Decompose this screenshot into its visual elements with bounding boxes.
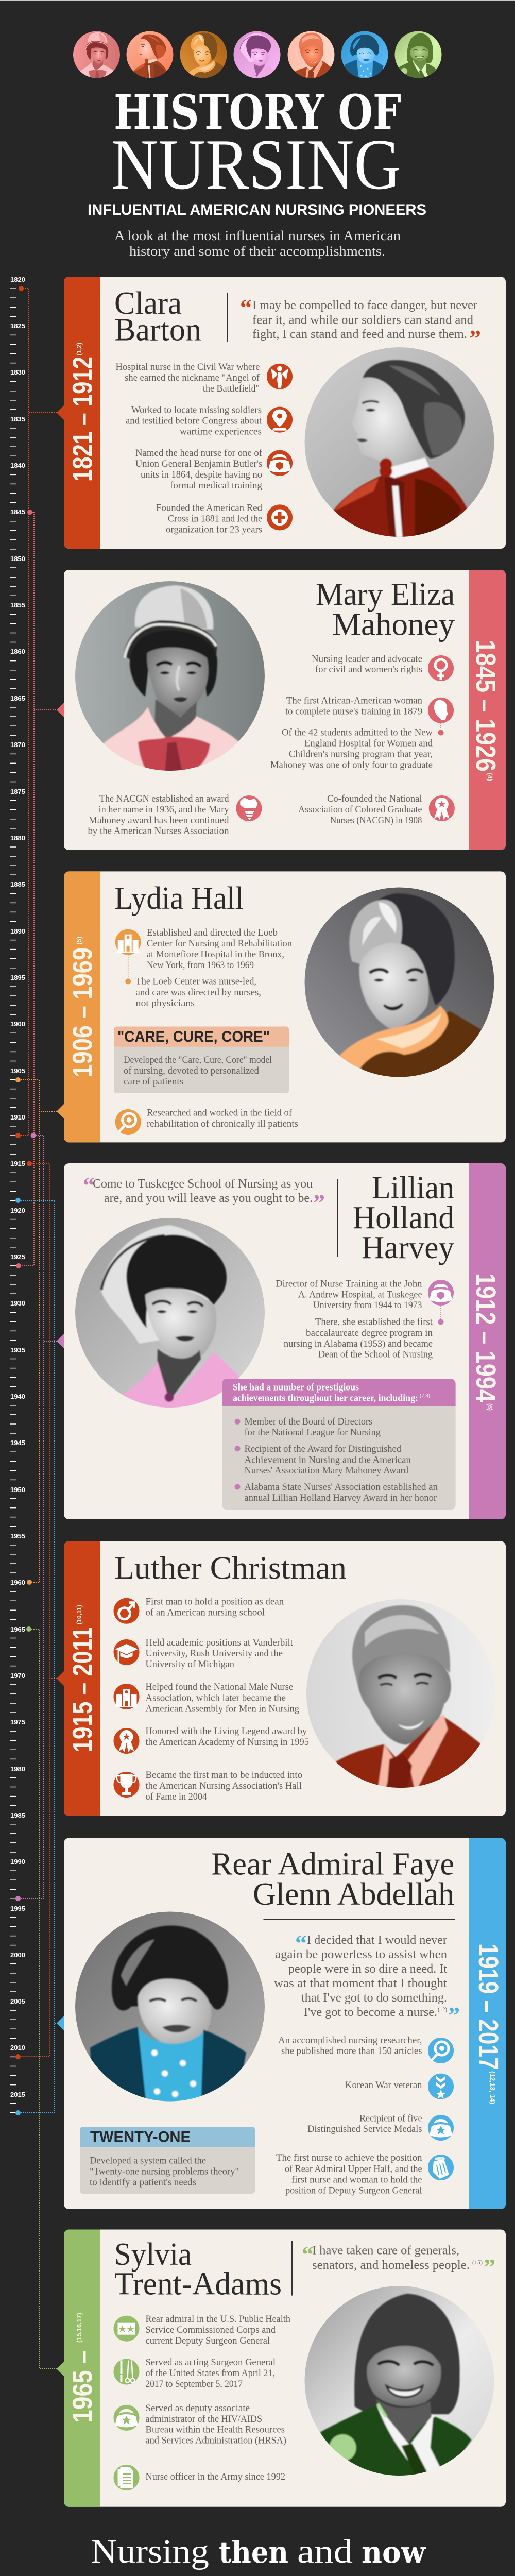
callout: Twenty-one: Developed a system called the	[90, 2155, 206, 2166]
quote: “	[240, 294, 252, 320]
callout: Twenty-one: to identify a patient's needs	[90, 2177, 196, 2188]
quote	[274, 1930, 460, 2028]
name: Rear Admiral Faye	[211, 1847, 454, 1882]
fact: rear admiral	[113, 2314, 290, 2346]
fact: Korean War veteran	[345, 2074, 454, 2099]
fact: acting Surgeon General	[113, 2357, 276, 2389]
fact: first male dean	[113, 1597, 284, 1624]
panel: Luther Christman	[57, 1541, 506, 1816]
portrait: Luther Christman	[306, 1599, 495, 1796]
quote: “	[302, 2241, 314, 2267]
fact: academic positions: University of Michigan	[145, 1659, 234, 1670]
portrait: Lydia Hall	[305, 887, 494, 1085]
fact: nurse-led: not physicians	[136, 998, 195, 1009]
card background	[64, 871, 506, 1142]
heading: Nursing then and now	[91, 2533, 426, 2570]
fact: NACGN award: in her name in 1936, and the Mary	[99, 804, 229, 815]
timeline year labels: 2010	[10, 2044, 25, 2052]
dates: 1915 – 2011	[67, 1627, 98, 1752]
fact: 42 students	[270, 727, 433, 770]
dates: 1821 – 1912	[67, 357, 98, 482]
fact: acting Surgeon General: Served as acting Surgeon General	[145, 2357, 276, 2368]
timeline year labels: 1945	[10, 1439, 25, 1447]
fact: Rear Admiral	[276, 2153, 454, 2196]
dates: (12,13, 14)	[489, 2071, 496, 2104]
fact: National Male Nurse Association	[113, 1682, 299, 1715]
fact: Red Cross: Founded the American Red	[156, 502, 262, 513]
fact: rehabilitation research: rehabilitation of chronically ill patients	[147, 1118, 298, 1129]
dates: (15,16,17)	[75, 2313, 83, 2343]
timeline year labels: 1965	[10, 1625, 25, 1633]
fact: Loeb Center	[115, 927, 292, 971]
timeline year labels: 1930	[10, 1299, 25, 1307]
name: Holland	[353, 1200, 454, 1235]
timeline year labels: 1890	[10, 927, 25, 935]
pointer	[57, 703, 64, 717]
connector: Mary Mahoney	[16, 510, 57, 1268]
quote	[240, 294, 481, 351]
quote: I have taken care of generals,	[312, 2244, 459, 2258]
fact: first male dean: of an American nursing school	[145, 1607, 265, 1618]
fact: Red Cross: Cross in 1881 and led the	[168, 513, 262, 524]
timeline year labels: 1960	[10, 1579, 25, 1586]
fact: head nurse: Named the head nurse for one of	[135, 448, 263, 459]
dates: (4)	[486, 773, 494, 781]
callout: achievements: Recipient of the Award for Distinguished	[244, 1444, 401, 1454]
timeline year labels: 1920	[10, 1207, 25, 1214]
timeline year labels: 1825	[10, 322, 25, 330]
portrait: Sylvia Trent-Adams	[305, 2286, 494, 2484]
callout: achievements: Achievement in Nursing and the American	[244, 1454, 411, 1465]
timeline year labels: 1980	[10, 1765, 25, 1773]
timeline year labels: 1875	[10, 788, 25, 795]
fact: first African-American: The first African-American woman	[286, 696, 422, 706]
timeline year labels: 1820	[10, 276, 25, 283]
timeline year labels: 1845	[10, 508, 25, 516]
date band	[64, 871, 100, 1142]
name: Luther Christman	[114, 1551, 347, 1586]
fact: first male dean: First man to hold a position as dean	[145, 1597, 284, 1607]
quote: again be powerless to assist when	[275, 1948, 447, 1961]
pointer	[57, 405, 64, 420]
date band	[64, 1541, 100, 1816]
fact: Rear Admiral: first nurse and woman to hold the	[291, 2174, 422, 2185]
fact: Hall of Fame: the American Nursing Association's Hall	[145, 1781, 302, 1791]
fact: head nurse: Union General Benjamin Butler's	[135, 459, 262, 469]
title	[111, 84, 401, 205]
quote: are, and you will leave as you ought to be.	[104, 1192, 313, 1205]
card background	[64, 1541, 506, 1816]
timeline year labels: 1985	[10, 1811, 25, 1819]
fact: missing soldiers: Worked to locate missing soldiers	[131, 405, 262, 416]
callout: Twenty-one: "Twenty-one nursing problems theory"	[90, 2166, 239, 2177]
fact: acting Surgeon General: of the United States from April 21,	[145, 2368, 275, 2379]
callout: achievements: Nurses' Association Mary Mahoney Award	[244, 1465, 408, 1476]
date band	[64, 277, 100, 549]
name: Glenn Abdellah	[253, 1877, 454, 1912]
quote: (15)	[472, 2259, 483, 2266]
fact: Army nurse	[113, 2465, 285, 2490]
timeline year labels: 1840	[10, 462, 25, 469]
callout: Care, Cure, Core: Developed the "Care, Cure, Core" model	[124, 1055, 272, 1065]
fact: co-founded NACGN	[298, 793, 455, 826]
panel: Sylvia Trent-Adams	[57, 2230, 506, 2507]
fact: National Male Nurse Association: Helped found the National Male Nurse	[145, 1682, 293, 1692]
fact: rehabilitation research	[115, 1108, 298, 1135]
fact: Hall of Fame: of Fame in 2004	[145, 1791, 207, 1802]
quote: ”	[484, 2254, 495, 2280]
fact: nurse-led: and care was directed by nurses,	[136, 987, 261, 998]
fact: 42 students: Of the 42 students admitted to the New	[282, 727, 433, 738]
fact: acting Surgeon General: 2017 to September 5, 2017	[145, 2379, 243, 2389]
fact: Loeb Center: Center for Nursing and Rehabilitation	[147, 938, 292, 949]
name: Mahoney	[332, 607, 455, 642]
subtitle: INFLUENTIAL AMERICAN NURSING PIONEERS	[88, 201, 426, 218]
portrait: Luther Christman small	[287, 31, 335, 80]
quote: was at that moment that I thought	[274, 1977, 447, 1990]
pointer	[57, 1671, 64, 1686]
fact: first African-American: to complete nurse's training in 1879	[285, 706, 422, 717]
fact: rear admiral: Service Commissioned Corps and	[145, 2325, 276, 2335]
quote: I decided that I would never	[307, 1934, 447, 1947]
fact: Service Medals: Recipient of five	[359, 2113, 422, 2124]
pointer	[57, 1104, 64, 1118]
quote: I've got to become a nurse.	[304, 2006, 437, 2019]
heading: Nursing then and now: then	[219, 2535, 288, 2570]
name	[114, 286, 201, 348]
dates: 1906 – 1969	[67, 947, 98, 1077]
fact: Red Cross: organization for 23 years	[166, 524, 262, 535]
timeline year labels: 1915	[10, 1160, 25, 1167]
fact: advocate: for civil and women's rights	[315, 664, 422, 675]
fact: rear admiral: current Deputy Surgeon General	[145, 2335, 270, 2346]
fact: Living Legend: the American Academy of Nursing in 1995	[145, 1737, 309, 1748]
timeline year labels: 2005	[10, 1997, 25, 2005]
panel: Rear Admiral Faye Glenn Abdellah	[57, 1838, 506, 2209]
fact: nurse-led: The Loeb Center was nurse-led,	[136, 976, 256, 987]
card background	[64, 2230, 506, 2507]
dates: (1,2)	[75, 343, 83, 355]
name: Lydia Hall	[114, 881, 244, 916]
dates: (5)	[75, 937, 83, 945]
card background	[64, 570, 506, 850]
callout: Care, Cure, Core	[114, 1026, 289, 1093]
pointer	[57, 2016, 64, 2030]
date band	[64, 2230, 100, 2507]
portrait: Lydia Hall small	[180, 31, 227, 80]
fact: nurse-led	[136, 976, 261, 1009]
quote: ”	[448, 2002, 460, 2028]
callout: achievements: for the National League for Nursing	[244, 1427, 381, 1438]
timeline year labels: 1855	[10, 601, 25, 609]
quote: ”	[469, 325, 481, 351]
timeline year labels: 1990	[10, 1858, 25, 1866]
fact: researcher: An accomplished nursing researcher,	[278, 2035, 422, 2046]
portrait: Clara Barton	[305, 347, 494, 545]
timeline	[10, 276, 57, 2369]
fact: head nurse	[135, 448, 293, 491]
fact: co-founded NACGN: Association of Colored Graduate	[298, 804, 422, 815]
name: Clara	[114, 286, 182, 321]
intro text	[114, 228, 401, 259]
fact: Director of Nurse Training	[276, 1279, 454, 1311]
timeline year labels	[10, 276, 25, 2098]
timeline year labels: 1935	[10, 1346, 25, 1354]
fact: Living Legend	[113, 1726, 309, 1754]
pointer	[57, 2362, 64, 2376]
quote: “	[83, 1172, 95, 1198]
fact: academic positions: Held academic positions at Vanderbilt	[145, 1637, 294, 1648]
heading: Nursing then and now: and	[297, 2533, 353, 2570]
callout: achievements: Member of the Board of Directors	[244, 1416, 372, 1427]
heading: Nursing then and now: now	[362, 2535, 426, 2570]
callout: Care, Cure, Core: of nursing, devoted to personalized	[124, 1065, 259, 1076]
quote: senators, and homeless people.	[312, 2259, 470, 2272]
fact: Director of Nurse Training: Director of Nurse Training at the John	[276, 1279, 422, 1290]
fact: rear admiral: Rear admiral in the U.S. Public Health	[145, 2314, 290, 2325]
fact: Rear Admiral: The first nurse to achieve the position	[276, 2153, 422, 2163]
fact: Army nurse: Nurse officer in the Army since 1992	[145, 2471, 285, 2482]
fact: baccalaureate program	[284, 1317, 433, 1360]
date band	[469, 1163, 506, 1519]
fact: Service Medals: Distinguished Service Medals	[307, 2124, 422, 2134]
timeline year labels: 1955	[10, 1532, 25, 1540]
fact: HIV/AIDS Bureau	[113, 2403, 286, 2446]
quote: ”	[313, 1190, 325, 1216]
fact: Director of Nurse Training: A. Andrew Hospital, at Tuskegee	[298, 1289, 422, 1300]
fact: head nurse: formal medical training	[170, 480, 262, 491]
fact: National Male Nurse Association: American Assembly for Men in Nursing	[145, 1703, 299, 1715]
name	[114, 2237, 282, 2302]
timeline year labels: 1830	[10, 368, 25, 376]
callout: achievements: achievements throughout her career, including:	[233, 1393, 418, 1404]
connector: Lydia Hall	[15, 1077, 57, 1585]
fact: Hall of Fame: Became the first man to be inducted into	[145, 1770, 302, 1781]
dates: (10,11)	[75, 1605, 83, 1624]
timeline year labels: 2015	[10, 2091, 25, 2098]
timeline year labels: 1880	[10, 834, 25, 842]
callout: achievements: She had a number of prestigious	[233, 1382, 359, 1393]
timeline year labels: 1940	[10, 1393, 25, 1400]
timeline year labels: 1895	[10, 974, 25, 981]
name: Harvey	[362, 1230, 454, 1265]
name: Sylvia	[114, 2237, 192, 2272]
card background	[64, 277, 506, 549]
fact: Service Medals	[307, 2113, 454, 2141]
fact: HIV/AIDS Bureau: administrator of the HIV/AIDS	[145, 2414, 262, 2425]
fact: NACGN award	[88, 793, 262, 837]
fact: Living Legend: Honored with the Living Legend award by	[145, 1726, 307, 1737]
quote: fight, I can stand and feed and nurse them.	[252, 328, 467, 341]
connector: Clara Barton	[15, 286, 57, 1138]
panel: Lillian Holland Harvey	[57, 1163, 506, 1519]
heading: Nursing then and now: Nursing	[91, 2533, 209, 2570]
timeline year labels: 1905	[10, 1067, 25, 1075]
quote: people were in so dire a need. It	[288, 1962, 447, 1976]
fact: rehabilitation research: Researched and worked in the field of	[147, 1108, 293, 1118]
fact: Loeb Center: Established and directed the Loeb	[147, 927, 278, 938]
quote: Come to Tuskegee School of Nursing as you	[93, 1177, 313, 1191]
fact: NACGN award: Mahoney award has been continued	[89, 815, 229, 826]
fact: researcher: she published more than 150 articles	[281, 2046, 422, 2057]
fact: nickname: Hospital nurse in the Civil War where	[115, 362, 260, 372]
quote: that I've got to do something.	[301, 1991, 447, 2005]
fact: NACGN award: by the American Nurses Association	[88, 826, 229, 837]
fact: head nurse: units in 1864, despite having no	[141, 469, 262, 480]
name	[316, 577, 455, 642]
portrait: Mary Mahoney	[75, 581, 265, 789]
timeline year labels: 1970	[10, 1672, 25, 1680]
name: Trent-Adams	[114, 2267, 282, 2302]
portrait: Sylvia Trent-Adams small	[394, 31, 442, 80]
intro text: A look at the most influential nurses in American	[114, 228, 401, 243]
fact: academic positions	[113, 1637, 294, 1670]
fact: nickname: she earned the nickname "Angel of	[125, 372, 260, 383]
name	[211, 1847, 454, 1912]
fact: Rear Admiral: of Rear Admiral Upper Half, and the	[285, 2163, 422, 2174]
header portraits row	[73, 31, 442, 82]
dates: (6)	[486, 1403, 494, 1411]
panel: Mary Eliza Mahoney	[57, 570, 506, 850]
fact: academic positions: University, Rush University and the	[145, 1648, 283, 1659]
callout: achievements: Alabama State Nurses' Association established an	[244, 1482, 438, 1493]
pointer	[57, 1334, 64, 1348]
fact: first African-American	[285, 696, 454, 723]
timeline year labels: 1885	[10, 880, 25, 888]
callout: achievements: annual Lillian Holland Harvey Award in her honor	[244, 1493, 437, 1503]
connector: Luther Christman	[15, 1161, 57, 2059]
fact: Korean War veteran: Korean War veteran	[345, 2080, 422, 2091]
timeline year labels: 1835	[10, 415, 25, 423]
fact: HIV/AIDS Bureau: Served as deputy associate	[145, 2403, 250, 2414]
fact: baccalaureate program: baccalaureate degree program in	[306, 1328, 433, 1338]
fact: 42 students: Children's nursing program that year,	[289, 749, 433, 759]
portrait: Lillian Harvey small	[233, 31, 281, 80]
timeline year labels: 1910	[10, 1113, 25, 1121]
title: HISTORY OF	[114, 84, 401, 140]
fact: National Male Nurse Association: Association, which later became the	[145, 1692, 286, 1703]
quote	[83, 1172, 325, 1216]
timeline year labels: 1850	[10, 555, 25, 563]
intro text: history and some of their accomplishments.	[129, 244, 385, 259]
fact: advocate	[312, 653, 454, 681]
connector: Faye Abdellah	[15, 1198, 57, 2115]
fact: advocate: Nursing leader and advocate	[312, 653, 422, 664]
timeline year labels: 1950	[10, 1486, 25, 1494]
title: NURSING	[111, 125, 401, 205]
timeline year labels: 1900	[10, 1020, 25, 1028]
quote: (12)	[438, 2006, 447, 2013]
portrait: Faye Abdellah	[75, 1911, 265, 2109]
callout: Twenty-one: TWENTY-ONE	[90, 2129, 191, 2145]
fact: co-founded NACGN: Nurses (NACGN) in 1908	[330, 815, 422, 826]
fact: HIV/AIDS Bureau: and Services Administration (HRSA)	[145, 2435, 286, 2446]
date band	[469, 1838, 506, 2209]
fact: Rear Admiral: position of Deputy Surgeon General	[285, 2185, 422, 2196]
quote: fear it, and while our soldiers can stand and	[252, 313, 473, 327]
quote: “	[295, 1930, 307, 1956]
timeline year labels: 1975	[10, 1718, 25, 1726]
fact: Loeb Center: New York, from 1963 to 1969	[147, 960, 254, 971]
portrait: Faye Abdellah small	[341, 31, 388, 80]
fact: missing soldiers: and testified before Congress about	[126, 416, 262, 427]
name	[353, 1171, 454, 1265]
panel: Clara Barton	[57, 277, 506, 549]
dates: 1845 – 1926	[470, 640, 501, 772]
callout: achievements	[222, 1379, 456, 1510]
fact: nickname: the Battlefield"	[203, 383, 260, 394]
portrait: Clara Barton small	[126, 31, 174, 80]
quote	[302, 2241, 495, 2280]
callout: Care, Cure, Core: "CARE, CURE, CORE"	[117, 1028, 270, 1045]
timeline year labels: 1925	[10, 1253, 25, 1261]
fact: baccalaureate program: nursing in Alabama (1953) and became	[284, 1338, 433, 1349]
fact: baccalaureate program: Dean of the School of Nursing	[318, 1349, 433, 1360]
fact: baccalaureate program: There, she established the first	[315, 1317, 433, 1328]
card background	[64, 1838, 506, 2209]
connector: Lillian Harvey	[15, 1133, 57, 1901]
fact: Hall of Fame	[113, 1770, 302, 1802]
timeline year labels: 2000	[10, 1951, 25, 1959]
date band	[469, 570, 506, 850]
dates: 1912 – 1994	[470, 1273, 501, 1402]
callout: Twenty-one	[80, 2127, 255, 2194]
fact: 42 students: England Hospital for Women and	[304, 738, 433, 749]
fact: missing soldiers	[126, 405, 293, 437]
timeline year labels: 1860	[10, 648, 25, 655]
panel: Lydia Hall	[57, 871, 506, 1142]
connector: Sylvia Trent-Adams	[26, 1626, 57, 2369]
fact: researcher	[278, 2035, 454, 2063]
fact: Director of Nurse Training: University from 1944 to 1973	[313, 1300, 422, 1311]
name: Barton	[114, 313, 201, 348]
quote: I may be compelled to face danger, but never	[252, 299, 477, 312]
fact: Loeb Center: at Montefiore Hospital in the Bronx,	[147, 949, 284, 960]
dates: 1919 – 2017	[473, 1943, 504, 2070]
fact: co-founded NACGN: Co-founded the National	[327, 793, 422, 804]
dates: 1965 –	[67, 2350, 98, 2423]
fact: nickname	[115, 362, 293, 394]
portrait: Mary Mahoney small	[73, 31, 120, 82]
fact: missing soldiers: wartime experiences	[180, 427, 262, 437]
portrait: Lillian Harvey	[75, 1218, 265, 1416]
name: Lillian	[372, 1171, 454, 1206]
fact: NACGN award: The NACGN established an award	[99, 793, 229, 804]
fact: HIV/AIDS Bureau: Bureau within the Health Resources	[145, 2425, 285, 2435]
timeline year labels: 1870	[10, 741, 25, 749]
name: Mary Eliza	[316, 577, 455, 612]
timeline year labels: 1865	[10, 694, 25, 702]
callout: achievements: (7,8)	[420, 1393, 430, 1399]
timeline year labels: 1995	[10, 1905, 25, 1912]
callout: Care, Cure, Core: care of patients	[124, 1076, 183, 1087]
fact: 42 students: Mahoney was one of only four to graduate	[270, 759, 433, 770]
card background	[64, 1163, 506, 1519]
fact: Red Cross	[156, 502, 293, 535]
